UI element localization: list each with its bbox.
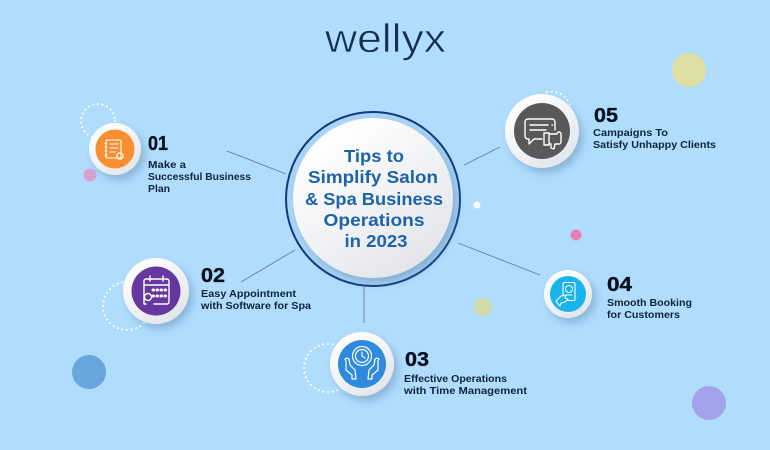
item 02: Easy Appointment (201, 289, 297, 300)
central title circle (286, 112, 460, 286)
heading: Simplify Salon (308, 167, 438, 187)
heading: Operations (324, 210, 425, 230)
item 03: with Time Management (403, 386, 528, 397)
item 01: Plan (148, 184, 170, 195)
icon: checklist (105, 140, 123, 159)
icon: message with thumbs down (525, 119, 561, 149)
item 02 (103, 258, 311, 330)
item 03: Effective Operations (404, 374, 507, 385)
item 05: Satisfy Unhappy Clients (593, 140, 716, 151)
item 05: Campaigns To (593, 128, 668, 139)
heading: & Spa Business (305, 189, 443, 209)
item 03: 03 (405, 349, 429, 371)
icon: calendar (144, 276, 169, 304)
item 02: 02 (201, 265, 225, 287)
heading: in 2023 (344, 231, 408, 251)
icon: hands holding clock (345, 346, 379, 379)
item 04: 04 (607, 274, 633, 296)
item 04 (544, 270, 692, 321)
item 05 (505, 92, 716, 168)
item 02: with Software for Spa (200, 301, 311, 312)
item 01: 01 (148, 133, 168, 155)
item 05: 05 (594, 105, 618, 127)
heading (305, 146, 443, 251)
decorative circles (72, 53, 726, 420)
item 03 (304, 332, 528, 397)
item 01: Make a (148, 160, 186, 171)
item 01: Successful Business (148, 172, 251, 183)
logo: wellyx: wellyx (324, 17, 446, 61)
item 04: for Customers (607, 310, 680, 321)
item 04: Smooth Booking (607, 298, 692, 309)
item 01 (81, 104, 251, 195)
connector lines (227, 147, 540, 323)
icon: phone booking (556, 282, 575, 306)
heading: Tips to (344, 146, 404, 166)
